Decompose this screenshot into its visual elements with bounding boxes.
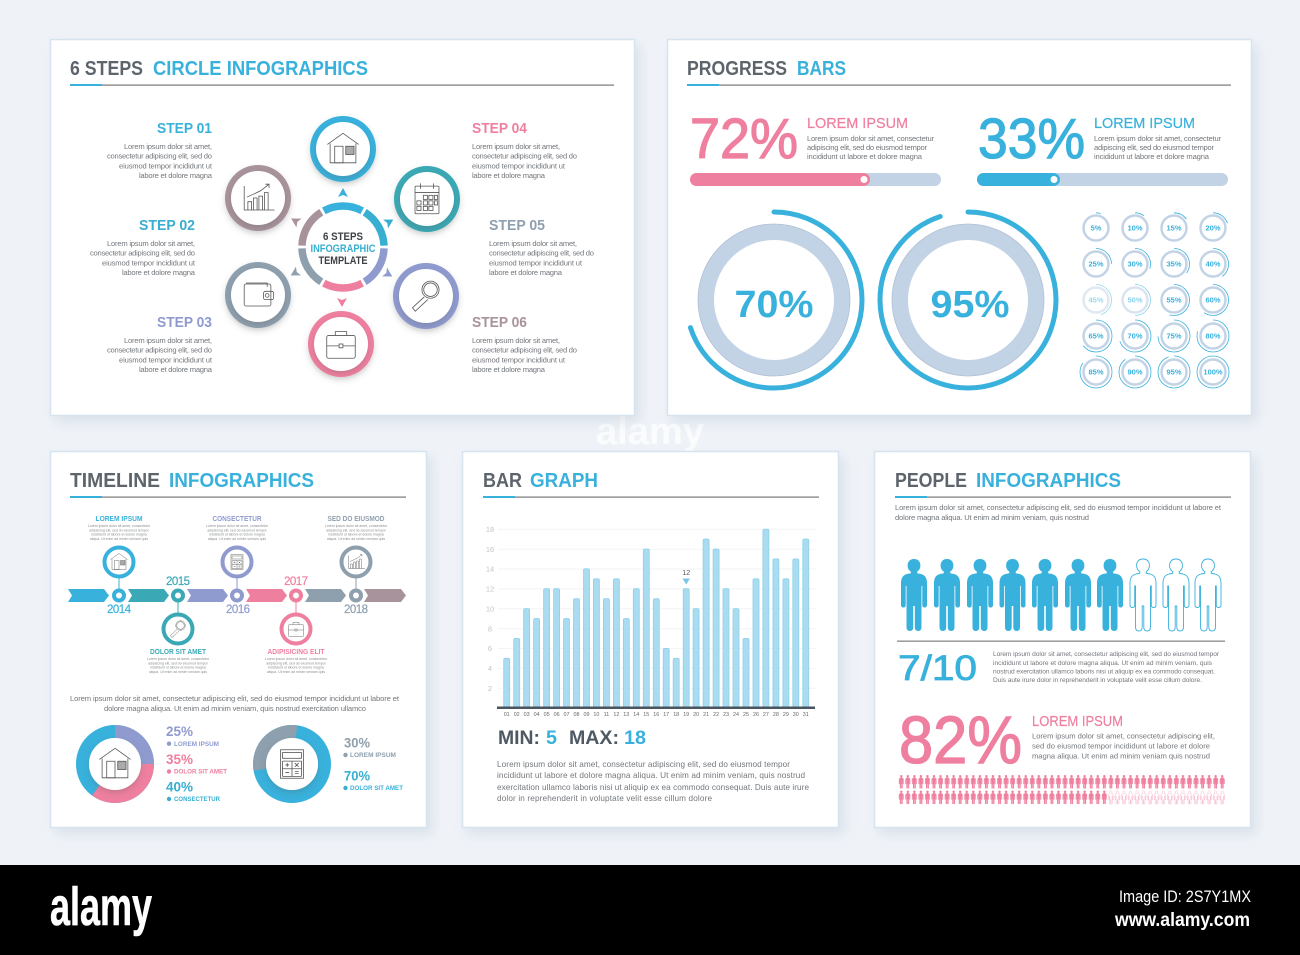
panel: people infographics	[874, 452, 1250, 828]
small radial gauges: 80%	[1205, 332, 1221, 341]
step 06 text: consectetur adipiscing elit, sed do	[472, 346, 577, 355]
timeline paragraph	[70, 694, 400, 713]
timeline event: sed do eiusmod: incididunt ut labore et dolore magna	[328, 533, 384, 537]
donut legend: 25%	[166, 724, 193, 739]
heading: progress bars: PROGRESS	[687, 58, 787, 80]
bar chart: 22	[713, 712, 719, 718]
donut legend: LOREM IPSUM	[350, 753, 396, 759]
small radial gauges	[1080, 213, 1229, 388]
donut legend: DOLOR SIT AMET	[350, 786, 403, 792]
small radial gauges: 40%	[1205, 260, 1221, 269]
step 02 text: consectetur adipiscing elit, sed do	[90, 249, 195, 258]
bar chart: 26	[753, 712, 759, 718]
stat 82%: 82%	[899, 703, 1022, 778]
progress 33%	[977, 107, 1228, 186]
radial gauge 70%: 70%	[734, 284, 814, 326]
step circle: chart	[225, 165, 291, 231]
min and max: 18	[624, 727, 646, 749]
bar chart: 08	[574, 712, 580, 718]
year labels: 2015	[166, 576, 190, 588]
bar chart: 25	[743, 712, 749, 718]
progress 72%: incididunt ut labore et dolore magna	[807, 152, 923, 161]
bar chart: 2	[488, 684, 492, 693]
bar chart: 4	[488, 664, 492, 673]
bar chart: 16	[653, 712, 659, 718]
year labels: 2017	[284, 576, 308, 588]
heading: timeline infographics: TIMELINE	[70, 470, 160, 492]
progress 72%	[690, 107, 941, 186]
bar chart: 09	[584, 712, 590, 718]
timeline event: dolor sit amet: incididunt ut labore et dolore magna	[150, 666, 206, 670]
step 03 text: labore et dolore magna	[139, 365, 213, 374]
step 05 text: labore et dolore magna	[489, 268, 563, 277]
small radial gauges: 100%	[1203, 368, 1223, 377]
heading: people infographics: INFOGRAPHICS	[976, 470, 1121, 492]
step 05 text: Lorem ipsum dolor sit amet,	[489, 239, 577, 248]
timeline nodes	[114, 590, 361, 600]
lorem ipsum block: Lorem ipsum dolor sit amet, consectetur adipiscing elit,	[1032, 732, 1215, 740]
step 05 text: STEP 05	[489, 218, 545, 234]
timeline event: consectetur: adipiscing elit, sed do eiusmod tempor	[207, 528, 268, 532]
small radial gauges: 60%	[1205, 296, 1221, 305]
progress 33%: incididunt ut labore et dolore magna	[1094, 152, 1210, 161]
donut legend: DOLOR SIT AMET	[174, 770, 227, 776]
center ring	[302, 206, 384, 288]
bar chart: 18	[673, 712, 679, 718]
small radial gauges: 15%	[1166, 224, 1182, 233]
timeline event: lorem ipsum: Lorem ipsum dolor sit amet, consectetur	[88, 524, 151, 528]
progress 72%: Lorem ipsum dolor sit amet, consectetur	[807, 134, 934, 143]
step circle: calendar	[394, 166, 460, 232]
bar chart: 28	[773, 712, 779, 718]
timeline paragraph: dolore magna aliqua. Ut enim ad minim veniam, quis nostrud exercitation ullamco	[104, 704, 366, 713]
small radial gauges: 90%	[1127, 368, 1143, 377]
timeline event: adipisicing elit: incididunt ut labore et dolore magna	[268, 666, 324, 670]
donut legend: LOREM IPSUM	[174, 742, 219, 748]
donut legend	[166, 724, 227, 803]
donut chart: 30 70	[260, 732, 324, 796]
timeline chevrons	[68, 589, 406, 602]
step 06 text: STEP 06	[472, 315, 527, 331]
donut legend: 40%	[166, 780, 193, 795]
heading: progress bars	[687, 58, 1231, 86]
lorem ipsum block: sed do eiusmod tempor incididunt ut labore et dolore	[1032, 742, 1210, 750]
timeline event: lorem ipsum: LOREM IPSUM	[96, 516, 143, 523]
arrows	[288, 188, 396, 307]
step 05 text: eiusmod tempor incididunt ut	[489, 258, 583, 267]
donut legend	[343, 736, 403, 792]
bar chart: 20	[693, 712, 699, 718]
bar chart: 8	[488, 624, 492, 633]
year labels	[107, 576, 368, 616]
progress 72%: 72%	[690, 107, 798, 171]
donut legend: CONSECTETUR	[174, 797, 221, 803]
people pictogram 7 of 10	[901, 559, 1221, 631]
timeline event: dolor sit amet: DOLOR SIT AMET	[150, 649, 207, 656]
stat paragraph: nostrud exercitation ullamco laboris nisi ut aliquip ex ea commodo consequat.	[993, 668, 1215, 676]
small radial gauges: 5%	[1091, 224, 1102, 233]
small radial gauges: 10%	[1127, 224, 1143, 233]
bar chart: 10	[486, 604, 494, 614]
timeline event: sed do eiusmod	[325, 516, 388, 576]
step 01 text: consectetur adipiscing elit, sed do	[107, 152, 212, 161]
bar chart: 19	[683, 712, 689, 718]
bar chart: 02	[514, 712, 520, 718]
timeline event: sed do eiusmod: Lorem ipsum dolor sit amet, consectetur	[325, 524, 388, 528]
center title: 6 STEPS	[323, 231, 363, 243]
progress 72%: adipiscing elit, sed do eiusmod tempor	[807, 143, 927, 152]
timeline event: adipisicing elit: ADIPISICING ELIT	[268, 649, 325, 656]
bar chart: 21	[703, 712, 709, 718]
step 04 text: consectetur adipiscing elit, sed do	[472, 152, 577, 161]
center title	[310, 231, 376, 267]
step 03 text: eiusmod tempor incididunt ut	[119, 355, 213, 364]
bar chart: 30	[793, 712, 799, 718]
min and max: MIN:	[498, 727, 540, 749]
radial gauge 95%	[880, 212, 1056, 388]
timeline event: sed do eiusmod: SED DO EIUSMOD	[328, 516, 384, 523]
step 02 text: Lorem ipsum dolor sit amet,	[107, 239, 195, 248]
step 05 text: consectetur adipiscing elit, sed do	[489, 249, 594, 258]
step 06 text: eiusmod tempor incididunt ut	[472, 355, 566, 364]
step 06 text: labore et dolore magna	[472, 365, 546, 374]
small radial gauges: 25%	[1088, 260, 1104, 269]
bar chart: 23	[723, 712, 729, 718]
bar graph paragraph: incididunt ut labore et dolore magna aliqua. Ut enim ad minim veniam, quis nostrud	[497, 771, 805, 780]
heading: people infographics	[895, 470, 1231, 498]
connectors	[119, 578, 356, 613]
footer url: www.alamy.com	[1114, 910, 1250, 931]
progress 33%: LOREM IPSUM	[1094, 116, 1195, 132]
bar chart: 13	[623, 712, 629, 718]
step circle: wallet	[225, 262, 291, 328]
heading: timeline infographics	[70, 470, 406, 498]
bar graph paragraph	[497, 760, 809, 803]
stat paragraph: Lorem ipsum dolor sit amet, consectetur adipiscing elit, sed do eiusmod tempor	[993, 651, 1220, 658]
step 04 text	[472, 121, 577, 180]
stat paragraph: Duis aute irure dolor in reprehenderit in voluptate velit esse cillum dolore.	[993, 677, 1202, 684]
timeline event: consectetur: aliqua. Ut enim ad minim veniam quis	[208, 537, 266, 541]
bar chart: 01	[504, 712, 510, 718]
timeline event: adipisicing elit	[265, 614, 328, 674]
bar graph paragraph: Lorem ipsum dolor sit amet, consectetur adipiscing elit, sed do eiusmod tempor	[497, 760, 790, 769]
step 04 text: Lorem ipsum dolor sit amet,	[472, 142, 560, 151]
timeline event: dolor sit amet	[147, 614, 210, 674]
small radial gauges: 70%	[1127, 332, 1143, 341]
lorem ipsum block: LOREM IPSUM	[1032, 714, 1123, 730]
timeline event: sed do eiusmod: aliqua. Ut enim ad minim veniam quis	[327, 537, 385, 541]
step 02 text: STEP 02	[139, 218, 195, 234]
step 06 text: Lorem ipsum dolor sit amet,	[472, 336, 560, 345]
timeline event: adipisicing elit: Lorem ipsum dolor sit amet, consectetur	[265, 657, 328, 661]
footer logo: alamy	[50, 877, 152, 937]
small radial gauges: 50%	[1127, 296, 1143, 305]
step 03 text: consectetur adipiscing elit, sed do	[107, 346, 212, 355]
heading: bar graph	[483, 470, 819, 498]
donut legend: 30%	[344, 736, 370, 751]
small radial gauges: 20%	[1205, 224, 1221, 233]
timeline event: dolor sit amet: Lorem ipsum dolor sit amet, consectetur	[147, 657, 210, 661]
timeline event: consectetur: incididunt ut labore et dolore magna	[209, 533, 265, 537]
small radial gauges: 30%	[1127, 260, 1143, 269]
bar chart: 04	[534, 712, 540, 718]
heading: 6 steps circle infographics: CIRCLE INFOGRAPHICS	[153, 58, 368, 80]
bar chart: 05	[544, 712, 550, 718]
stat 7/10: 7/10	[898, 649, 977, 688]
bar chart: 15	[643, 712, 649, 718]
donut legend: 70%	[344, 769, 370, 784]
year labels: 2014	[107, 604, 132, 616]
small radial gauges: 35%	[1166, 260, 1182, 269]
bar chart: 27	[763, 712, 769, 718]
heading: progress bars: BARS	[797, 58, 846, 80]
panel: progress bars	[668, 40, 1252, 416]
panel: 6 steps circle infographics	[50, 40, 634, 416]
step 01 text: eiusmod tempor incididunt ut	[119, 161, 213, 170]
bar chart: 18	[486, 525, 494, 534]
footer bar	[0, 865, 1300, 955]
step 03 text	[107, 315, 213, 374]
small radial gauges: 65%	[1088, 332, 1104, 341]
lorem ipsum block: magna aliqua. Ut enim ad minim veniam quis nostrud	[1032, 752, 1210, 760]
step 04 text: STEP 04	[472, 121, 527, 137]
bar chart: 03	[524, 712, 530, 718]
heading: timeline infographics: INFOGRAPHICS	[169, 470, 314, 492]
timeline event: adipisicing elit: adipiscing elit, sed do eiusmod tempor	[266, 661, 327, 665]
step circle: briefcase	[308, 311, 374, 377]
year labels: 2018	[344, 604, 368, 616]
step 05 text	[489, 218, 594, 277]
stat paragraph	[993, 651, 1220, 684]
min and max	[498, 727, 646, 749]
step circle: house	[310, 116, 376, 182]
step 02 text	[90, 218, 196, 277]
lorem ipsum block	[1032, 714, 1215, 760]
timeline event: lorem ipsum: adipiscing elit, sed do eiusmod tempor	[89, 528, 150, 532]
timeline event: consectetur: Lorem ipsum dolor sit amet, consectetur	[206, 524, 269, 528]
bar chart: 31	[803, 712, 809, 718]
step 06 text	[472, 315, 577, 374]
progress 33%: 33%	[978, 107, 1085, 171]
small radial gauges: 55%	[1166, 296, 1182, 305]
timeline event: lorem ipsum	[88, 516, 151, 576]
step 04 text: eiusmod tempor incididunt ut	[472, 161, 566, 170]
center title: INFOGRAPHIC	[310, 243, 376, 255]
timeline event: dolor sit amet: adipiscing elit, sed do eiusmod tempor	[148, 661, 209, 665]
bar chart: 12	[613, 712, 619, 718]
panel: bar graph	[462, 452, 838, 828]
bar graph paragraph: exercitation ullamco laboris nisi ut aliquip ex ea commodo consequat. Duis aute irure	[497, 783, 809, 792]
small radial gauges: 95%	[1166, 368, 1182, 377]
panel: timeline infographics	[50, 452, 426, 828]
step 02 text: eiusmod tempor incididunt ut	[102, 258, 196, 267]
radial gauge 70%	[686, 212, 862, 388]
bar chart: 06	[554, 712, 560, 718]
small radial gauges: 75%	[1166, 332, 1182, 341]
footer image id: Image ID: 2S7Y1MX	[1119, 888, 1251, 906]
donut chart: 25 35 40	[82, 732, 148, 796]
min and max: MAX:	[569, 727, 619, 749]
step 01 text: Lorem ipsum dolor sit amet,	[124, 142, 212, 151]
bar chart: 17	[663, 712, 669, 718]
step 01 text	[107, 121, 213, 180]
timeline event: lorem ipsum: incididunt ut labore et dolore magna	[91, 533, 147, 537]
heading: 6 steps circle infographics: 6 STEPS	[70, 58, 143, 80]
heading: people infographics: PEOPLE	[895, 470, 967, 492]
progress 72%: LOREM IPSUM	[807, 116, 908, 132]
watermark: alamy	[596, 411, 704, 453]
timeline event: consectetur: CONSECTETUR	[212, 516, 262, 523]
bar chart: 14	[486, 565, 494, 574]
people intro paragraph: Lorem ipsum dolor sit amet, consectetur adipiscing elit, sed do eiusmod tempor incididunt ut labore et	[895, 503, 1222, 512]
step 03 text: Lorem ipsum dolor sit amet,	[124, 336, 212, 345]
bar chart: 6	[488, 644, 492, 653]
small radial gauges: 85%	[1088, 368, 1104, 377]
people intro paragraph: dolore magna aliqua. Ut enim ad minim veniam, quis nostrud	[895, 513, 1089, 522]
step 04 text: labore et dolore magna	[472, 171, 546, 180]
bar chart: 07	[564, 712, 570, 718]
bar chart: 16	[486, 545, 494, 554]
heading: bar graph: GRAPH	[530, 470, 598, 492]
bar graph paragraph: dolor in reprehenderit in voluptate velit esse cillum dolore	[497, 794, 712, 803]
progress 33%: Lorem ipsum dolor sit amet, consectetur	[1094, 134, 1221, 143]
bar chart: 12	[486, 585, 494, 594]
bar chart	[486, 525, 816, 718]
timeline event: sed do eiusmod: adipiscing elit, sed do eiusmod tempor	[326, 528, 387, 532]
stat paragraph: incididunt ut labore et dolore magna aliqua. Ut enim ad minim veniam, quis	[993, 660, 1213, 667]
bar chart: 12	[682, 570, 690, 577]
bar chart: 24	[733, 712, 739, 718]
donut legend: 35%	[166, 752, 193, 767]
bar chart: 10	[593, 712, 599, 718]
step 02 text: labore et dolore magna	[122, 268, 196, 277]
step 01 text: labore et dolore magna	[139, 171, 213, 180]
progress 33%: adipiscing elit, sed do eiusmod tempor	[1094, 143, 1214, 152]
timeline event: lorem ipsum: aliqua. Ut enim ad minim veniam quis	[90, 537, 148, 541]
people intro paragraph	[895, 503, 1222, 522]
center title: TEMPLATE	[318, 255, 368, 267]
heading: 6 steps circle infographics	[70, 58, 614, 86]
people pictogram 82 of 100	[898, 775, 1226, 804]
heading: bar graph: BAR	[483, 470, 522, 492]
min and max: 5	[546, 727, 557, 749]
timeline event: adipisicing elit: aliqua. Ut enim ad minim veniam quis	[267, 670, 325, 674]
year labels: 2016	[226, 604, 250, 616]
step 03 text: STEP 03	[157, 315, 212, 331]
timeline event: consectetur	[206, 516, 269, 576]
radial gauge 95%: 95%	[930, 284, 1010, 326]
timeline event: dolor sit amet: aliqua. Ut enim ad minim veniam quis	[149, 670, 207, 674]
bar chart: 29	[783, 712, 789, 718]
timeline paragraph: Lorem ipsum dolor sit amet, consectetur adipiscing elit, sed do eiusmod tempor incididunt ut labore et	[70, 694, 400, 703]
small radial gauges: 45%	[1088, 296, 1104, 305]
step 01 text: STEP 01	[157, 121, 212, 137]
bar chart: 14	[633, 712, 639, 718]
step circle: magnifier	[393, 263, 459, 329]
bar chart: 11	[604, 712, 609, 718]
